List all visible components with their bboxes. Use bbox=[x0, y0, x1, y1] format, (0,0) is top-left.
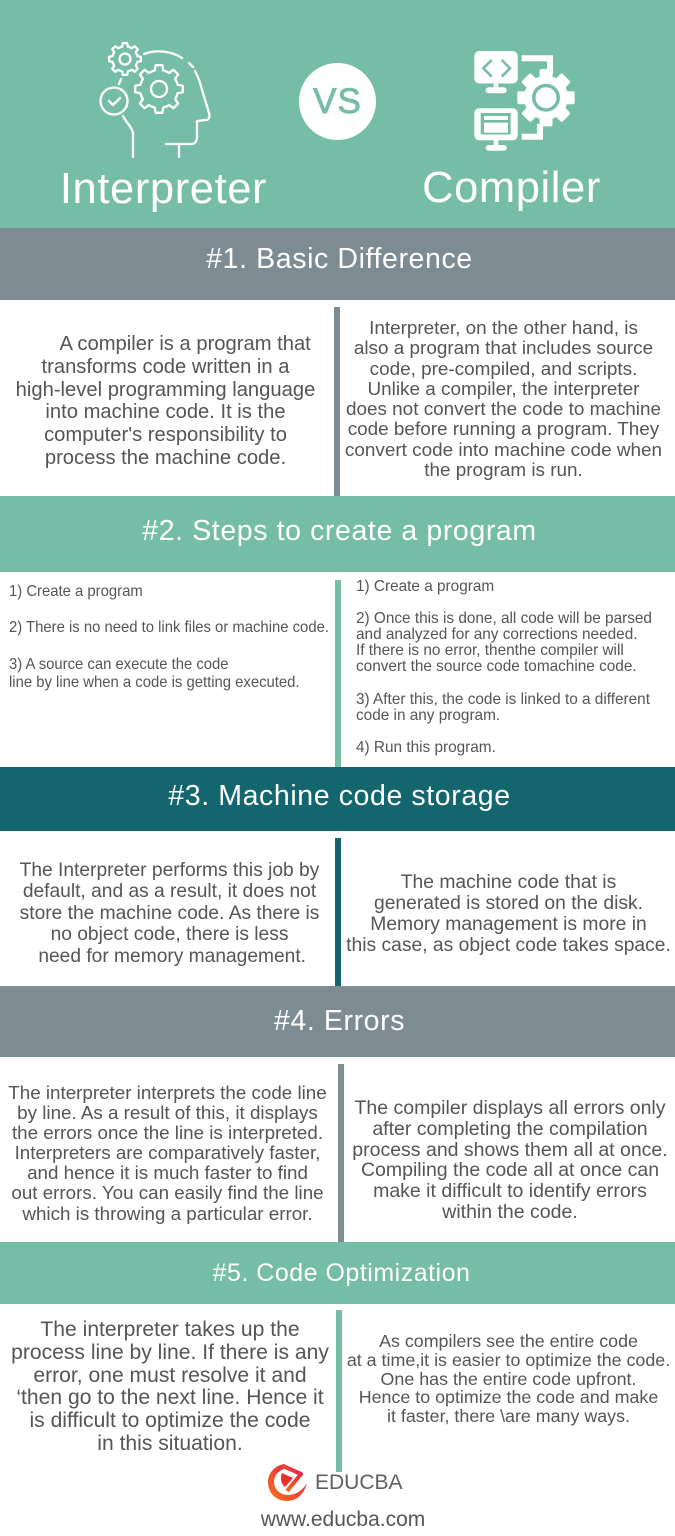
divider bbox=[335, 838, 341, 986]
vs badge bbox=[299, 63, 376, 140]
website url: www.educba.com bbox=[261, 1508, 425, 1531]
text: basic difference compiler: Interpreter, on the other hand, is bbox=[369, 318, 638, 339]
text: steps compiler: 1) Create a program bbox=[356, 578, 494, 595]
educba wordmark: EDUCBA bbox=[315, 1471, 403, 1494]
text: errors interpreter: the errors once the line is interpreted. bbox=[12, 1122, 323, 1143]
text: storage interpreter: The Interpreter performs this job by bbox=[20, 860, 319, 880]
heading: code optimization bbox=[0, 1242, 675, 1304]
text: storage interpreter: need for memory management. bbox=[38, 946, 306, 966]
text: errors interpreter: by line. As a result of this, it displays bbox=[17, 1102, 318, 1123]
text: steps compiler: convert the source code tomachine code. bbox=[356, 658, 637, 675]
icon: head with gears bbox=[99, 42, 210, 158]
text: errors interpreter: The interpreter interprets the code line bbox=[8, 1082, 327, 1103]
text: errors compiler: after completing the compilation bbox=[372, 1118, 648, 1140]
vs badge: VS bbox=[313, 82, 362, 121]
text: basic difference interpreter: process the machine code. bbox=[45, 447, 286, 469]
text: storage interpreter bbox=[20, 860, 320, 966]
text: optimization compiler: One has the entire code upfront. bbox=[381, 1369, 636, 1389]
text: steps compiler: 3) After this, the code is linked to a different bbox=[356, 691, 650, 708]
heading: basic difference bbox=[0, 228, 675, 300]
text: storage interpreter: store the machine code. As there is bbox=[20, 902, 319, 924]
compiler title: Compiler bbox=[422, 164, 601, 212]
divider bbox=[336, 1310, 342, 1472]
text: errors compiler: Compiling the code all at once can bbox=[361, 1159, 659, 1181]
heading: machine code storage bbox=[0, 767, 675, 831]
text: errors interpreter: and hence it is much faster to find bbox=[27, 1162, 308, 1183]
text: steps compiler: 4) Run this program. bbox=[356, 739, 496, 756]
text: basic difference interpreter: high-level programming language bbox=[16, 379, 315, 401]
text: basic difference interpreter: computer's responsibility to bbox=[44, 424, 287, 446]
divider bbox=[335, 580, 341, 767]
heading: errors: #4. Errors bbox=[274, 1005, 405, 1037]
text: errors compiler: The compiler displays all errors only bbox=[354, 1097, 666, 1119]
text: optimization compiler: it faster, there \are many ways. bbox=[387, 1406, 630, 1426]
text: optimization interpreter: is difficult to optimize the code bbox=[29, 1409, 310, 1432]
text: basic difference compiler: also a program that includes source bbox=[354, 338, 653, 359]
text: storage compiler: Memory management is more in bbox=[370, 914, 647, 935]
divider bbox=[338, 1064, 344, 1242]
text: basic difference interpreter: into machine code. It is the bbox=[45, 401, 286, 423]
text: basic difference interpreter: transforms code written in a bbox=[42, 356, 289, 378]
text: storage interpreter: no object code, there is less bbox=[51, 924, 288, 945]
heading: errors bbox=[0, 986, 675, 1057]
heading: basic difference: #1. Basic Difference bbox=[206, 243, 473, 275]
text: basic difference compiler bbox=[345, 318, 662, 481]
heading: machine code storage: #3. Machine code storage bbox=[168, 780, 511, 812]
text: steps compiler: code in any program. bbox=[356, 707, 500, 724]
text: optimization compiler: at a time,it is easier to optimize the code. bbox=[347, 1350, 670, 1370]
interpreter title: Interpreter bbox=[60, 165, 267, 213]
text: steps interpreter: 2) There is no need to link files or machine code. bbox=[9, 619, 329, 636]
text: storage compiler: generated is stored on the disk. bbox=[374, 893, 643, 914]
icon: monitors and gear bbox=[474, 51, 575, 151]
text: errors interpreter bbox=[8, 1082, 327, 1224]
text: steps interpreter bbox=[9, 582, 329, 691]
text: steps interpreter: line by line when a code is getting executed. bbox=[9, 674, 300, 691]
text: steps compiler: 2) Once this is done, all code will be parsed bbox=[356, 610, 652, 627]
text: optimization interpreter: in this situation. bbox=[97, 1432, 243, 1455]
heading: steps bbox=[0, 496, 675, 572]
text: basic difference interpreter bbox=[16, 333, 315, 469]
text: errors interpreter: Interpreters are comparatively faster, bbox=[15, 1142, 320, 1163]
text: optimization interpreter: error, one must resolve it and bbox=[33, 1364, 307, 1387]
text: errors compiler: within the code. bbox=[442, 1201, 578, 1223]
text: steps interpreter: 3) A source can execute the code bbox=[9, 656, 229, 673]
text: optimization compiler: Hence to optimize the code and make bbox=[359, 1387, 658, 1407]
text: basic difference compiler: code before running a program. They bbox=[348, 419, 659, 440]
text: errors interpreter: out errors. You can easily find the line bbox=[11, 1182, 324, 1203]
text: steps interpreter: 1) Create a program bbox=[9, 582, 143, 600]
divider bbox=[334, 307, 340, 496]
text: basic difference compiler: does not convert the code to machine bbox=[346, 399, 661, 420]
text: errors compiler bbox=[352, 1097, 668, 1223]
text: basic difference compiler: Unlike a compiler, the interpreter bbox=[368, 379, 639, 400]
text: storage compiler: this case, as object code takes space. bbox=[346, 935, 671, 956]
text: basic difference compiler: code, pre-compiled, and scripts. bbox=[370, 359, 637, 380]
text: optimization interpreter: process line by line. If there is any bbox=[11, 1341, 329, 1364]
text: optimization interpreter bbox=[11, 1318, 329, 1455]
text: storage interpreter: default, and as a result, it does not bbox=[23, 881, 316, 902]
text: steps compiler bbox=[356, 578, 652, 756]
icon: educba mark bbox=[268, 1464, 307, 1501]
text: optimization compiler bbox=[347, 1331, 670, 1426]
text: storage compiler bbox=[346, 872, 671, 956]
text: steps compiler: If there is no error, thenthe compiler will bbox=[356, 642, 624, 659]
text: basic difference interpreter: A compiler is a program that bbox=[59, 333, 311, 355]
text: optimization compiler: As compilers see the entire code bbox=[379, 1331, 638, 1351]
heading: code optimization: #5. Code Optimization bbox=[213, 1259, 470, 1287]
text: errors compiler: make it difficult to identify errors bbox=[373, 1180, 647, 1202]
text: storage compiler: The machine code that is bbox=[401, 872, 616, 893]
logo: educba bbox=[268, 1464, 403, 1501]
text: steps compiler: and analyzed for any corrections needed. bbox=[356, 626, 637, 643]
text: errors interpreter: which is throwing a particular error. bbox=[22, 1203, 313, 1224]
text: optimization interpreter: The interpreter takes up the bbox=[40, 1318, 300, 1341]
text: optimization interpreter: ‘then go to the next line. Hence it bbox=[16, 1386, 324, 1409]
text: errors compiler: process and shows them all at once. bbox=[352, 1139, 668, 1161]
heading: steps: #2. Steps to create a program bbox=[142, 515, 537, 547]
header panel bbox=[0, 0, 675, 228]
text: basic difference compiler: the program is run. bbox=[424, 460, 583, 481]
text: basic difference compiler: convert code into machine code when bbox=[345, 440, 662, 461]
